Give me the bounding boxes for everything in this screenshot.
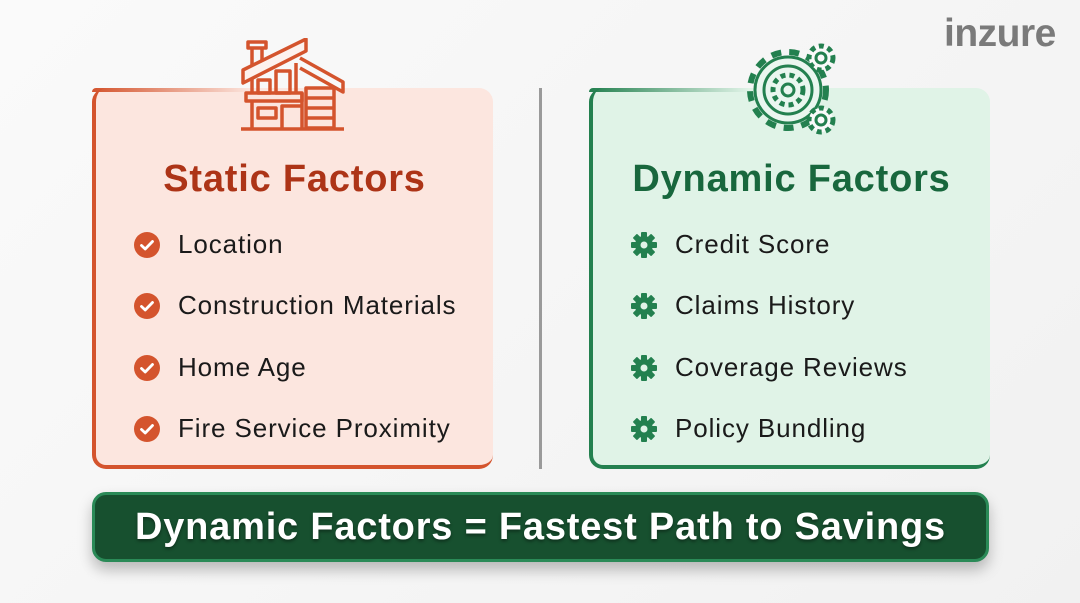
panel: static factors <box>92 88 493 469</box>
icon: house <box>241 38 345 131</box>
divider <box>539 88 542 469</box>
item: construction: Construction Materials <box>178 290 456 320</box>
item: coverage: Coverage Reviews <box>675 352 908 382</box>
panel: dynamic factors <box>589 88 990 469</box>
heading: dynamic: Dynamic Factors <box>632 158 951 200</box>
item: bundling: Policy Bundling <box>675 413 866 443</box>
heading: static: Static Factors <box>163 158 426 200</box>
item: location: Location <box>178 229 284 259</box>
item: claims: Claims History <box>675 290 855 320</box>
banner: Dynamic Factors = Fastest Path to Savings <box>135 506 946 548</box>
banner <box>92 492 989 562</box>
item: home age: Home Age <box>178 352 307 382</box>
icon: gears <box>747 44 836 134</box>
item: credit: Credit Score <box>675 229 830 259</box>
item: fire: Fire Service Proximity <box>178 413 451 443</box>
logo: inzure <box>944 12 1056 55</box>
